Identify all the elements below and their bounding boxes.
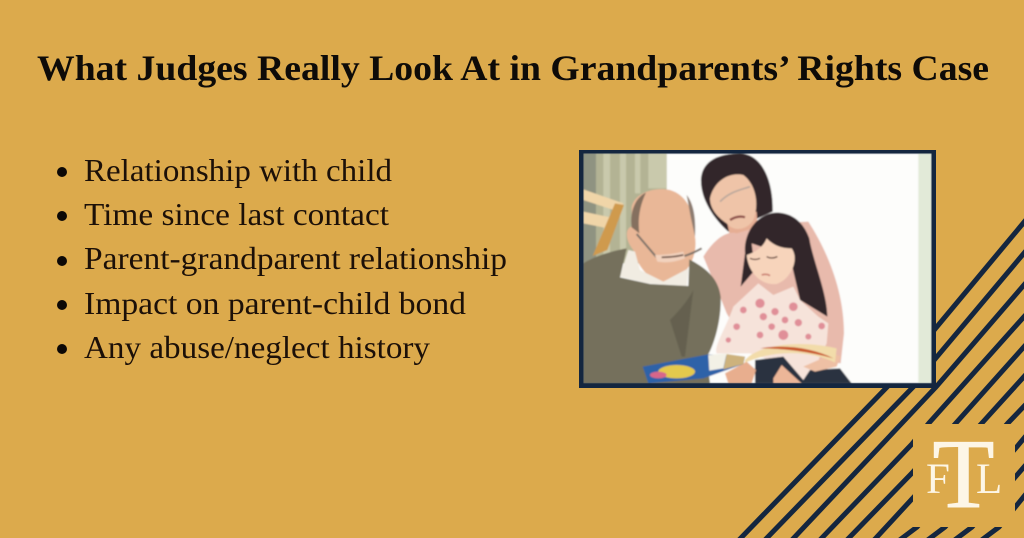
chair bbox=[583, 189, 624, 256]
bullet: time since last contact: Time since last contact bbox=[84, 196, 389, 232]
decorative diagonal stripes bbox=[737, 215, 1024, 538]
open book bbox=[643, 354, 745, 383]
photo frame: grandparents reading with a child bbox=[579, 150, 936, 388]
title: What Judges Really Look At in Grandparents’ Rights Case bbox=[37, 48, 989, 88]
grandfather head bbox=[627, 189, 696, 282]
hands bbox=[725, 362, 756, 383]
grandfather sweater bbox=[583, 248, 721, 383]
photo illustration bbox=[583, 153, 932, 383]
grandmother neck bbox=[726, 210, 758, 234]
grandmother face bbox=[710, 174, 756, 229]
bullet list bbox=[57, 152, 507, 365]
grandfather collar bbox=[620, 250, 688, 286]
logo: FTL monogram: F bbox=[926, 456, 950, 503]
bullet: parent-grandparent relationship: Parent-grandparent relationship bbox=[84, 240, 507, 276]
logo: FTL monogram: L bbox=[976, 456, 1002, 503]
bullet: impact on parent-child bond: Impact on parent-child bond bbox=[84, 285, 466, 321]
curtain bbox=[583, 153, 667, 263]
bullet: abuse or neglect history: Any abuse/neglect history bbox=[84, 329, 430, 365]
girl hair and pigtail bbox=[741, 213, 827, 317]
girl blouse bbox=[716, 283, 828, 383]
grandmother sweater bbox=[703, 222, 844, 363]
girl face bbox=[747, 238, 795, 284]
bullet: relationship with child: Relationship with child bbox=[84, 152, 392, 188]
logo: FTL monogram: T bbox=[932, 420, 994, 529]
grandmother hair bbox=[701, 153, 773, 232]
dark trousers bbox=[755, 357, 852, 383]
